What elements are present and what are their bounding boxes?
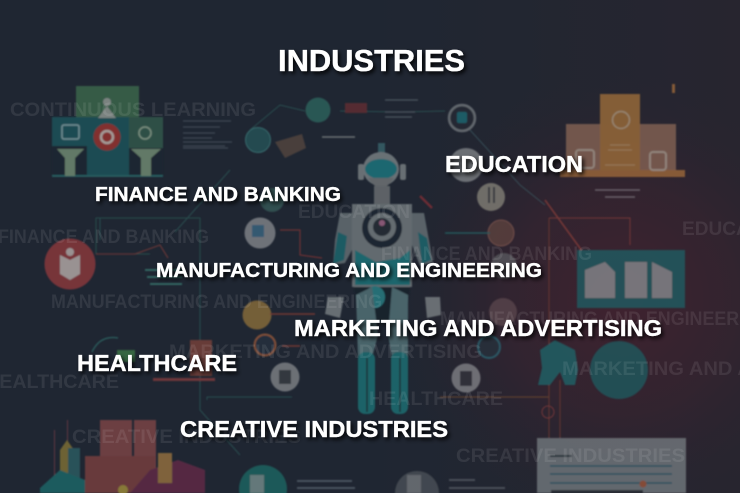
bottom-left city — [40, 420, 205, 493]
ghost labels: FINANCE AND BANKING — [381, 244, 592, 265]
panel: teal documents — [577, 250, 685, 308]
circuit, centre red — [280, 230, 322, 258]
ghost labels: MARKETING AND ADVERTISING — [169, 342, 482, 363]
ghost labels: EDUCATION — [298, 202, 410, 223]
icons right of robot — [420, 105, 630, 440]
ghost labels: FINANCE AND BANKING — [0, 227, 209, 248]
red circle icon — [44, 238, 96, 290]
ghost labels: CREATIVE INDUSTRIES — [72, 427, 301, 448]
label: finance and banking: FINANCE AND BANKING — [95, 183, 341, 206]
title: INDUSTRIES — [278, 43, 465, 78]
panel: bottom-right chart — [537, 438, 686, 493]
ghost labels — [0, 100, 740, 467]
panel: top-left podium — [52, 86, 163, 177]
teal book circle and captions — [239, 465, 505, 493]
green chart, left — [92, 338, 215, 381]
label: marketing and advertising: MARKETING AND ADVERTISING — [294, 315, 662, 341]
ghost labels: CONTINUOUS LEARNING — [10, 100, 256, 121]
faded illustration — [40, 84, 686, 493]
label: creative industries: CREATIVE INDUSTRIES — [180, 416, 448, 442]
ghost labels: CREATIVE INDUSTRIES — [456, 446, 685, 467]
icon circles centre-left — [244, 218, 276, 248]
robot — [325, 143, 441, 414]
ghost labels: MANUFACTURING AND ENGINEERING — [51, 292, 382, 313]
label: manufacturing and engineering: MANUFACTURING AND ENGINEERING — [156, 259, 542, 282]
circuit lines and nodes, upper left — [100, 105, 445, 455]
label: education: EDUCATION — [445, 151, 583, 177]
ghost labels: HEALTHCARE — [369, 389, 503, 410]
label: healthcare: HEALTHCARE — [77, 350, 237, 376]
panel: orange podium — [560, 84, 685, 197]
small text lines — [183, 121, 232, 148]
teal figure and circle — [538, 340, 648, 399]
